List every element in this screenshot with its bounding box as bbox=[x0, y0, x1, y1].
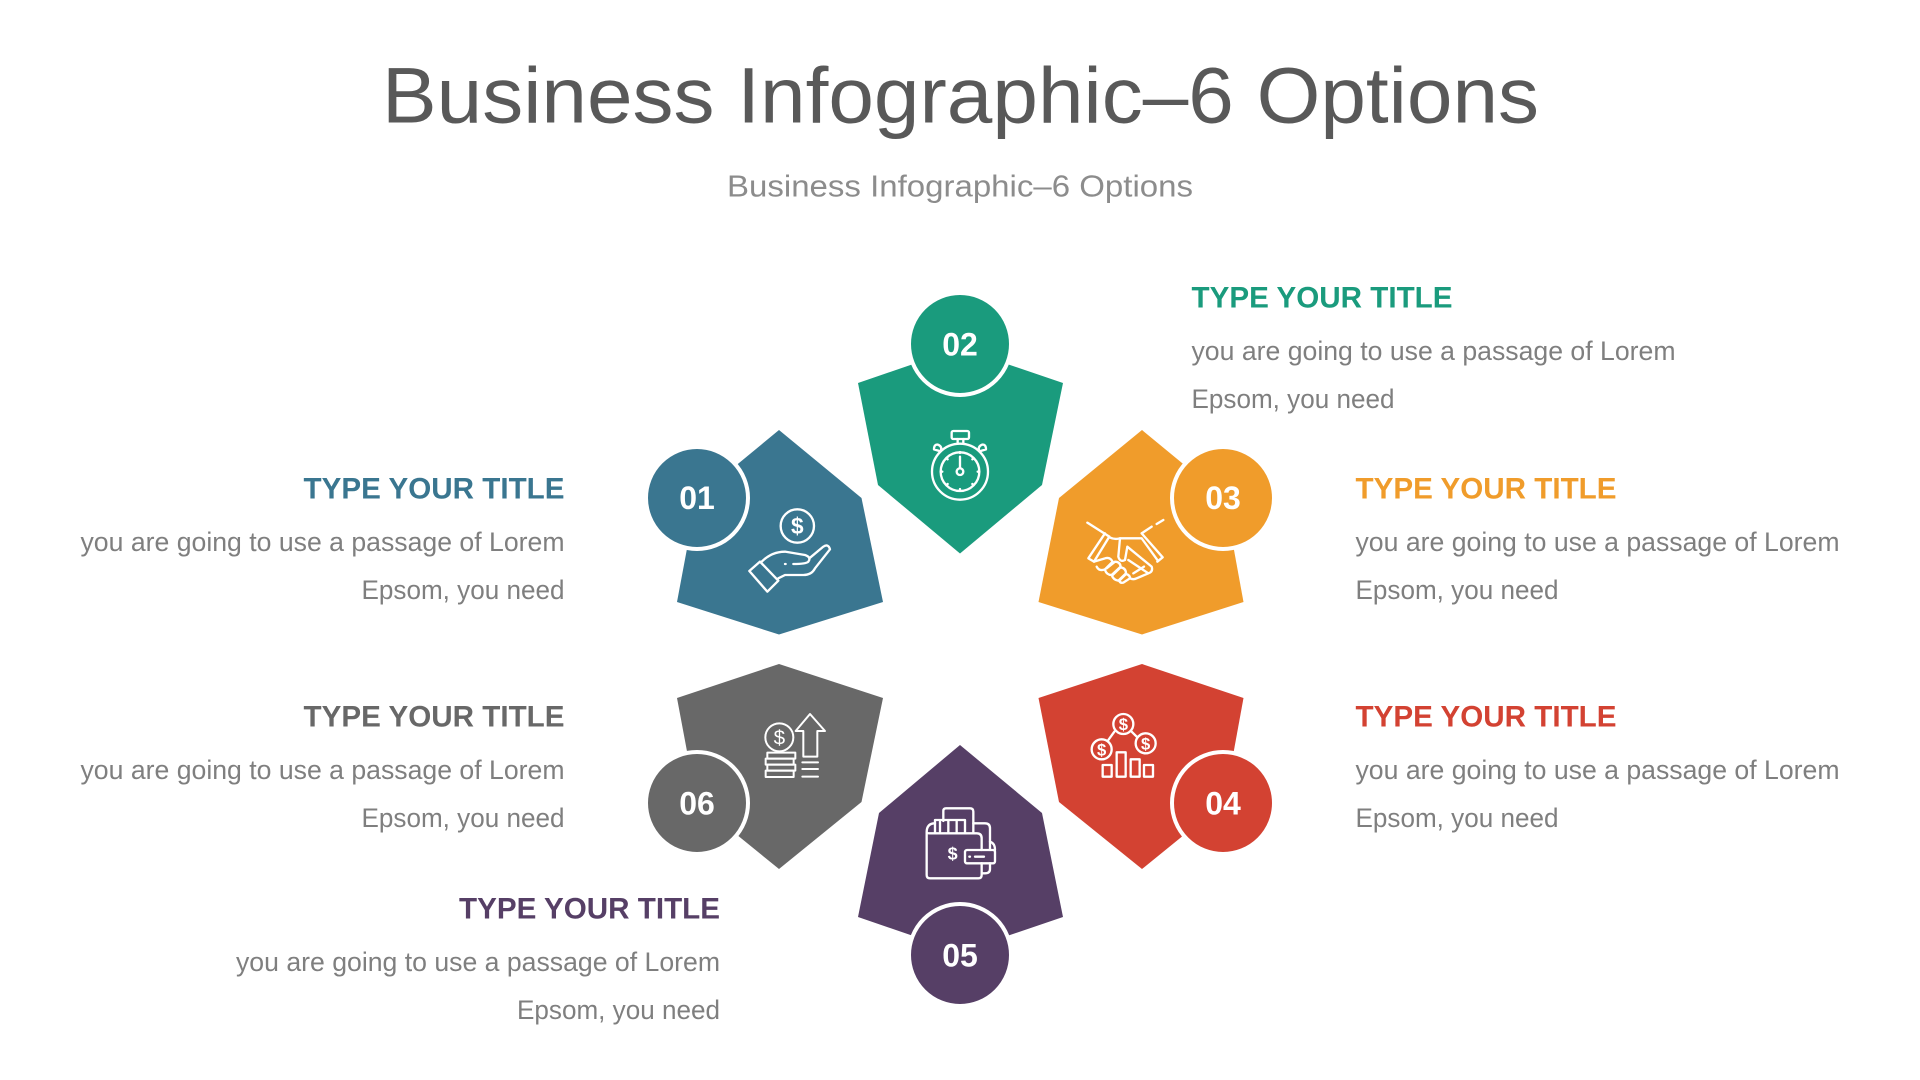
title: Business Infographic–6 Options bbox=[382, 50, 1539, 140]
text block 03: TYPE YOUR TITLE bbox=[1356, 472, 1616, 506]
pentagon 06 bbox=[677, 664, 883, 869]
panel: option 04 bbox=[1038, 664, 1274, 869]
text block 03: you are going to use a passage of Lorem bbox=[1356, 527, 1840, 557]
number badge 04: 04 bbox=[1205, 786, 1241, 822]
text block 02: you are going to use a passage of Lorem bbox=[1192, 336, 1676, 366]
number badge 05: 05 bbox=[942, 938, 978, 974]
number badge 03 bbox=[1172, 447, 1274, 549]
text block 06 bbox=[80, 700, 564, 833]
number badge 02 bbox=[909, 293, 1011, 395]
icon: wallet: $ bbox=[948, 844, 958, 864]
text block 01 bbox=[80, 472, 564, 605]
text block 05: TYPE YOUR TITLE bbox=[459, 892, 720, 926]
text block 05: Epsom, you need bbox=[517, 995, 720, 1025]
text block 06: Epsom, you need bbox=[362, 803, 564, 833]
panel: option 06 bbox=[646, 664, 883, 869]
text block 02 bbox=[1192, 282, 1676, 414]
text block 01: TYPE YOUR TITLE bbox=[304, 472, 564, 506]
icon: coins network and bars: $ bbox=[1141, 734, 1151, 753]
text block 04: Epsom, you need bbox=[1356, 803, 1558, 833]
number badge 06: 06 bbox=[679, 786, 715, 822]
pentagon 01 bbox=[677, 430, 883, 634]
icon: hand holding coin: $ bbox=[791, 513, 804, 539]
panel: option 02 bbox=[858, 293, 1063, 554]
icon: stopwatch bbox=[932, 431, 988, 500]
number badge 01: 01 bbox=[679, 480, 715, 516]
panel: option 03 bbox=[1038, 430, 1274, 634]
number badge 01 bbox=[646, 447, 748, 549]
icon: coins and up arrow: $ bbox=[774, 727, 786, 750]
text block 05 bbox=[236, 892, 720, 1025]
subtitle: Business Infographic–6 Options bbox=[727, 168, 1193, 204]
text block 02: Epsom, you need bbox=[1192, 384, 1394, 414]
text block 06: TYPE YOUR TITLE bbox=[304, 700, 564, 734]
number badge 02: 02 bbox=[942, 326, 978, 362]
panel: option 05 bbox=[858, 745, 1063, 1006]
icon: hand holding coin bbox=[749, 509, 830, 592]
icon: handshake bbox=[1087, 520, 1163, 583]
text block 03 bbox=[1356, 472, 1840, 605]
text block 05: you are going to use a passage of Lorem bbox=[236, 947, 720, 977]
number badge 06 bbox=[646, 752, 748, 854]
pentagon 04 bbox=[1038, 664, 1244, 869]
panel: option 01 bbox=[646, 430, 883, 634]
text block 04: TYPE YOUR TITLE bbox=[1356, 700, 1616, 734]
text block 01: you are going to use a passage of Lorem bbox=[80, 527, 564, 557]
icon: coins network and bars bbox=[1092, 714, 1156, 777]
text block 01: Epsom, you need bbox=[362, 575, 564, 605]
pentagon 03 bbox=[1038, 430, 1244, 634]
text block 04 bbox=[1356, 700, 1840, 833]
icon: wallet bbox=[927, 808, 995, 878]
text block 04: you are going to use a passage of Lorem bbox=[1356, 755, 1840, 785]
pentagon 05 bbox=[858, 745, 1063, 952]
text block 02: TYPE YOUR TITLE bbox=[1192, 282, 1452, 314]
icon: coins network and bars: $ bbox=[1119, 715, 1129, 734]
icon: coins network and bars: $ bbox=[1097, 740, 1107, 759]
number badge 05 bbox=[909, 904, 1011, 1006]
number badge 04 bbox=[1172, 752, 1274, 854]
text block 03: Epsom, you need bbox=[1356, 575, 1558, 605]
icon: coins and up arrow bbox=[765, 714, 825, 777]
text block 06: you are going to use a passage of Lorem bbox=[80, 755, 564, 785]
number badge 03: 03 bbox=[1205, 480, 1241, 516]
pentagon 02 bbox=[858, 348, 1063, 554]
